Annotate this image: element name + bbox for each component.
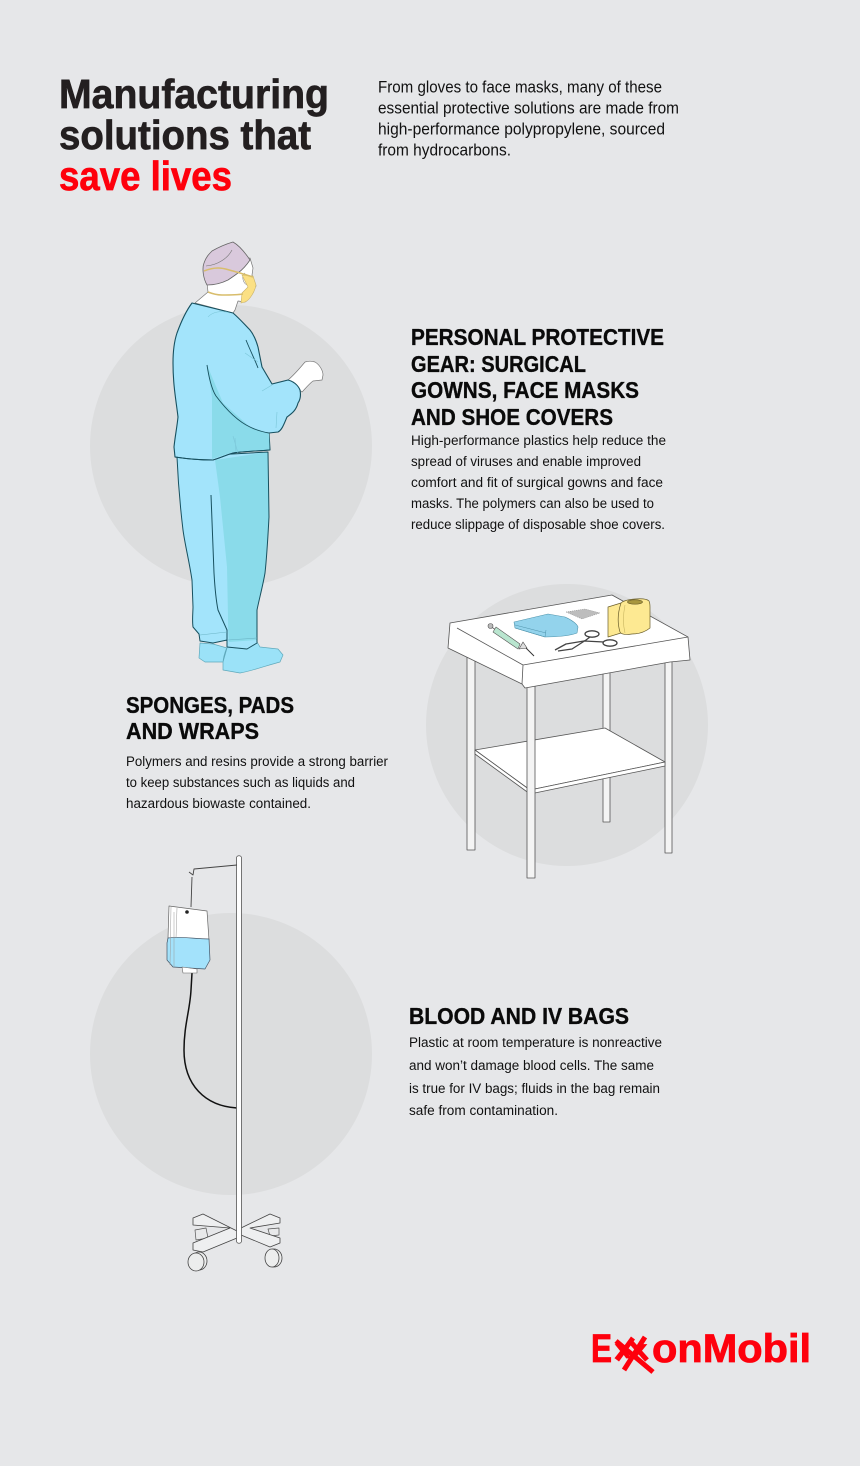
towel folds [515, 625, 546, 637]
title: Manufacturing [59, 71, 329, 117]
heading [411, 324, 664, 430]
illustration: table with supplies [448, 595, 690, 878]
gown [173, 303, 300, 460]
heading: BLOOD AND IV BAGS [409, 1003, 629, 1029]
heading: GOWNS, FACE MASKS [411, 377, 639, 403]
table top [448, 595, 690, 688]
body [126, 754, 388, 811]
trousers [177, 452, 269, 649]
hat [203, 242, 250, 285]
stand base [193, 1214, 280, 1252]
face mask [241, 275, 256, 303]
stand pole [236, 856, 242, 1243]
circle: IV backdrop [90, 913, 372, 1195]
gauze [566, 609, 600, 619]
heading: SPONGES, PADS [126, 692, 294, 718]
table fold [457, 628, 688, 684]
heading [126, 692, 294, 744]
table legs and shelf [467, 655, 672, 878]
title: save lives [59, 153, 232, 199]
wheels [188, 1249, 282, 1271]
section: protective gear text [411, 324, 666, 532]
body: is true for IV bags; fluids in the bag remain [409, 1081, 660, 1096]
IV bag [167, 906, 210, 973]
body [409, 1035, 662, 1118]
illustration: IV bag and stand [167, 856, 282, 1271]
gown folds [175, 340, 270, 460]
body: Polymers and resins provide a strong barrier [126, 754, 388, 769]
intro text: essential protective solutions are made from [378, 100, 679, 118]
syringe [488, 624, 534, 656]
title: solutions that [59, 112, 311, 158]
mask straps [204, 268, 253, 295]
circle: gear backdrop [90, 305, 372, 587]
trouser outline [177, 452, 269, 649]
section: sponges text [126, 692, 388, 811]
body: Plastic at room temperature is nonreactive [409, 1035, 662, 1050]
intro text: high-performance polypropylene, sourced [378, 120, 665, 138]
intro text [378, 78, 679, 160]
illustration: medical worker in protective gear [173, 242, 323, 673]
IV tube [184, 973, 237, 1108]
logo: ExxonMobil [591, 1327, 811, 1372]
heading: GEAR: SURGICAL [411, 351, 586, 377]
section: blood bags text [409, 1003, 662, 1118]
trousers shade [215, 452, 269, 642]
neck and head [195, 258, 256, 313]
tape roll [608, 599, 650, 637]
body: hazardous biowaste contained. [126, 796, 311, 811]
body: to keep substances such as liquids and [126, 775, 355, 790]
body: reduce slippage of disposable shoe covers. [411, 517, 665, 532]
body: safe from contamination. [409, 1103, 558, 1118]
scissors [555, 631, 617, 651]
logo: ExxonMobil: E [591, 1327, 612, 1371]
intro text: From gloves to face masks, many of these [378, 78, 662, 96]
circle: table backdrop [426, 584, 708, 866]
logo: ExxonMobil: x [631, 1334, 648, 1364]
title [59, 71, 329, 199]
logo: ExxonMobil: onMobil [652, 1327, 811, 1371]
body: masks. The polymers can also be used to [411, 496, 654, 511]
body: comfort and fit of surgical gowns and face [411, 475, 663, 490]
body: spread of viruses and enable improved [411, 454, 641, 469]
heading: AND WRAPS [126, 718, 259, 744]
hand [288, 361, 323, 392]
cuff lines [200, 632, 257, 640]
body [411, 433, 666, 532]
logo: ExxonMobil: x [615, 1334, 632, 1364]
heading: PERSONAL PROTECTIVE [411, 324, 664, 350]
hook arm [189, 865, 237, 907]
body: and won’t damage blood cells. The same [409, 1058, 654, 1073]
folded towel [514, 614, 578, 637]
body: High-performance plastics help reduce the [411, 433, 666, 448]
hat fold [206, 250, 232, 266]
intro text: from hydrocarbons. [378, 142, 511, 160]
ear [243, 273, 247, 285]
shoe covers [199, 642, 283, 673]
heading: AND SHOE COVERS [411, 404, 613, 430]
gown shade [207, 365, 270, 459]
wheel mounts [195, 1228, 279, 1240]
